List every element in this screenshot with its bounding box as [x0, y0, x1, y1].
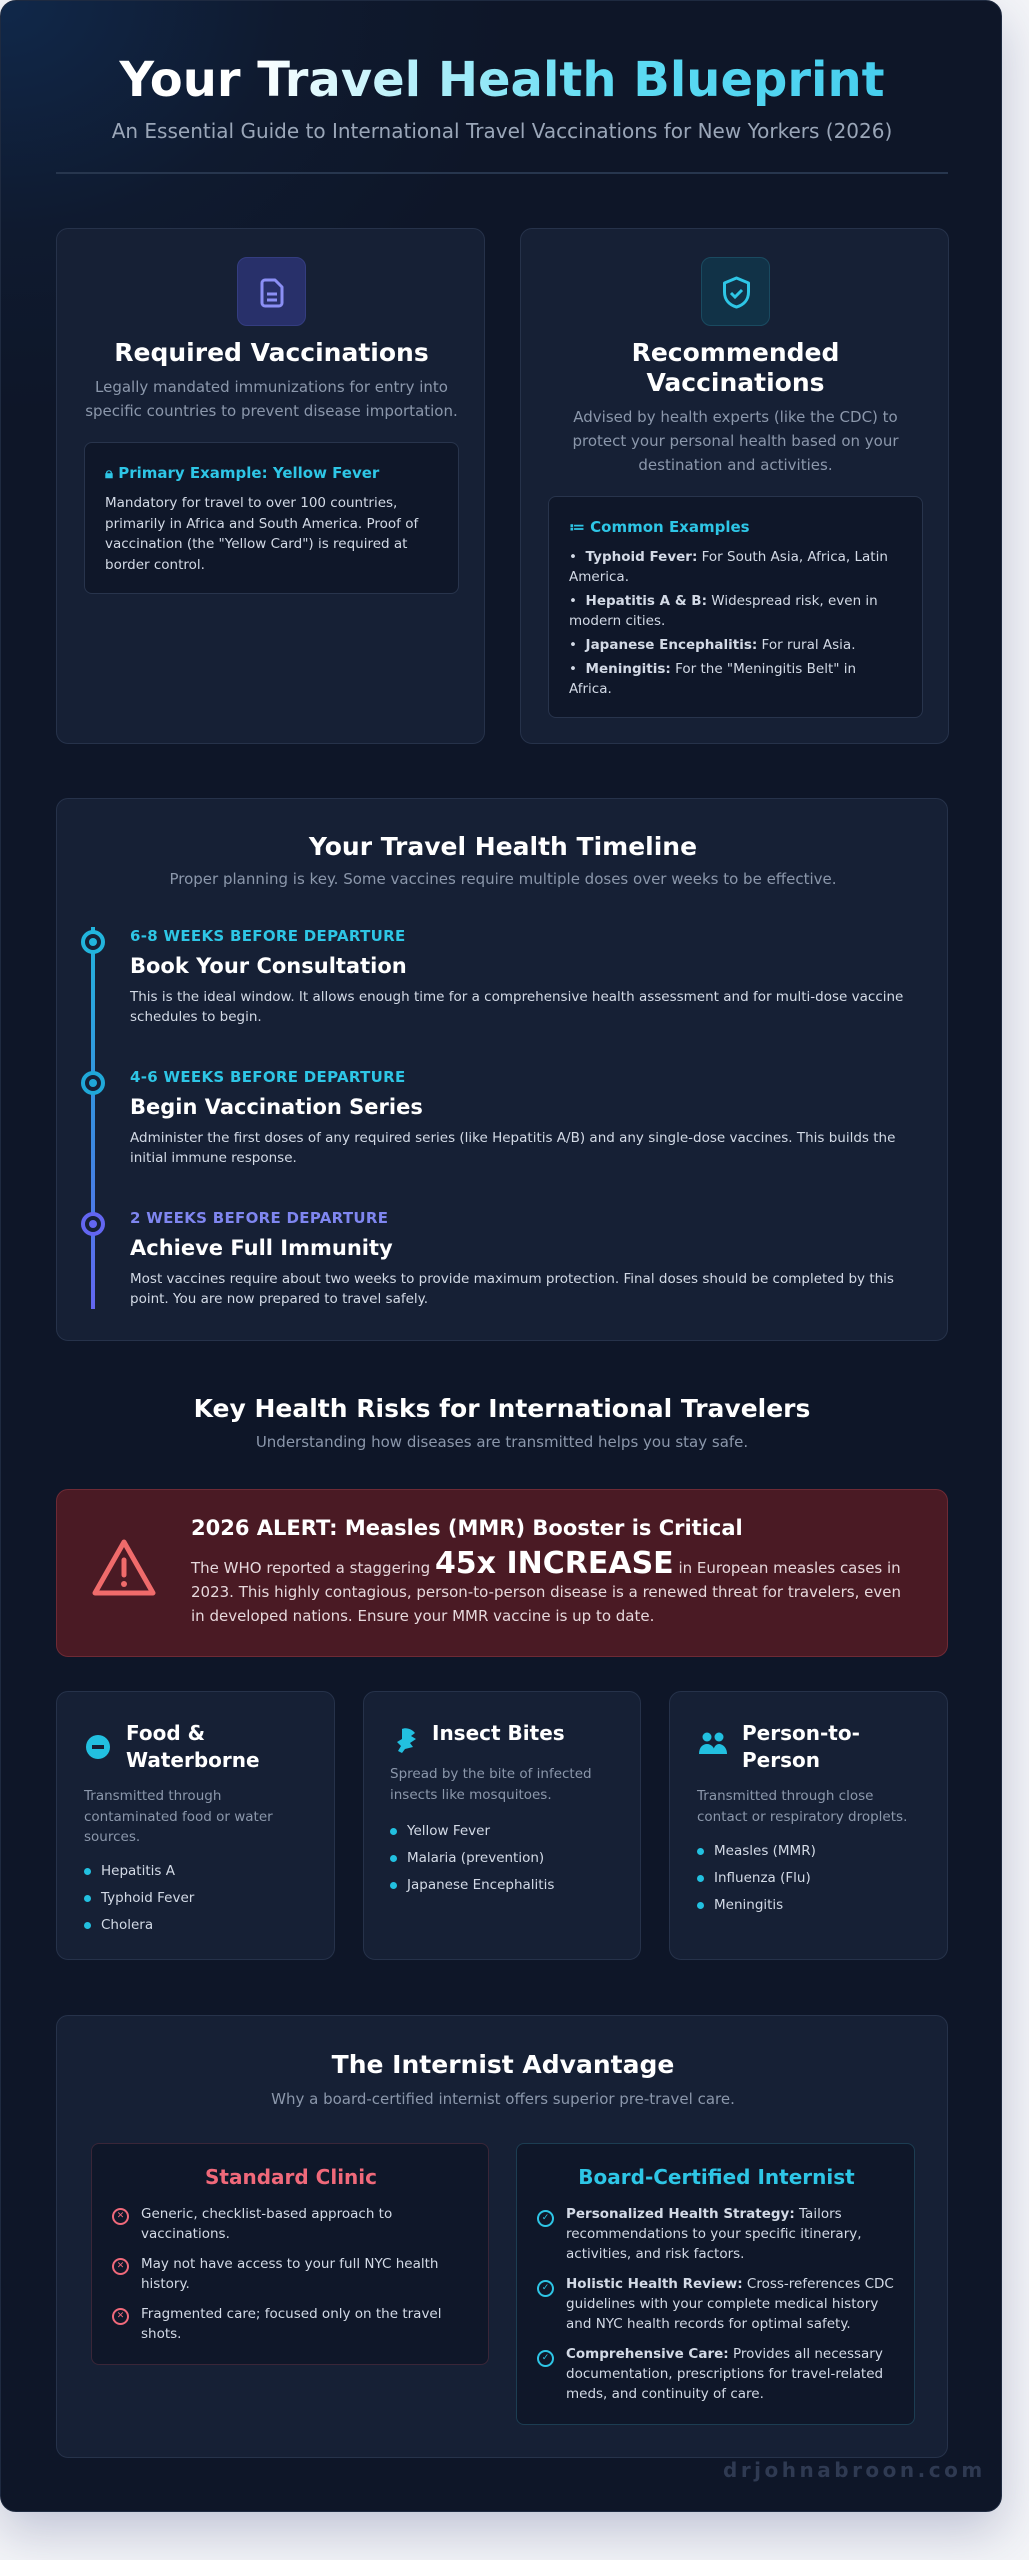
panel: food & waterborne: Hepatitis A: [101, 1863, 175, 1879]
box: standard clinic: ✕: [117, 2261, 124, 2271]
panel: recommended vaccinations: [520, 228, 949, 744]
callout: yellow fever: 🔒︎ Primary Example: Yellow Fever: [105, 464, 379, 482]
callout: common examples: • Typhoid Fever: For South Asia, Africa, Latin America.: [569, 549, 888, 585]
panel: person-to-person: Measles (MMR): [714, 1843, 816, 1859]
box: board-certified internist: Holistic Health Review: Cross-references CDC guidelines with your complete medical history and NYC health records for optimal safety.: [566, 2276, 894, 2332]
panel: person-to-person: [669, 1691, 948, 1960]
box: standard clinic: [91, 2143, 489, 2365]
heading: Vaccinations: [646, 368, 825, 397]
panel: food & waterborne: [56, 1691, 335, 1960]
step 1: Book Your Consultation: [130, 954, 407, 978]
step 1: This is the ideal window. It allows enough time for a comprehensive health assessment and for multi-dose vaccine schedules to begin.: [130, 989, 903, 1025]
step 3: 2 WEEKS BEFORE DEPARTURE: [130, 1209, 388, 1227]
panel: internist advantage: The Internist Advantage: [332, 2050, 674, 2079]
box: board-certified internist: Personalized Health Strategy: Tailors recommendations to your specific itinerary, activities, and risk factors.: [566, 2206, 862, 2262]
subtitle: An Essential Guide to International Travel Vaccinations for New Yorkers (2026): [112, 119, 892, 143]
step 1: [81, 927, 903, 1025]
box: board-certified internist: ✓: [542, 2283, 549, 2293]
panel: food & waterborne: Transmitted through contaminated food or water sources.: [84, 1788, 273, 1845]
icon: no-entry: [86, 1735, 110, 1759]
callout: common examples: • Hepatitis A & B: Widespread risk, even in modern cities.: [569, 593, 878, 629]
title: Your Travel Health Blueprint: [119, 52, 885, 108]
callout: measles alert: 2026 ALERT: Measles (MMR) Booster is Critical: [191, 1516, 743, 1540]
box: board-certified internist: [516, 2143, 915, 2425]
callout: common examples: • Japanese Encephalitis: For rural Asia.: [569, 637, 856, 653]
panel: person-to-person: Person-to-: [742, 1721, 860, 1745]
step 2: 4-6 WEEKS BEFORE DEPARTURE: [130, 1068, 406, 1086]
heading: Your Travel Health Timeline: [309, 832, 697, 861]
box: standard clinic: Fragmented care; focused only on the travel shots.: [141, 2306, 442, 2342]
panel: person-to-person: Person: [742, 1748, 820, 1772]
box: board-certified internist: ✓: [542, 2353, 549, 2363]
box: standard clinic: ✕: [117, 2211, 124, 2221]
subtitle: risks: Understanding how diseases are transmitted helps you stay safe.: [256, 1433, 748, 1451]
box: board-certified internist: ✓: [542, 2213, 549, 2223]
panel: food & waterborne: Waterborne: [126, 1748, 260, 1772]
step 2: Begin Vaccination Series: [130, 1095, 423, 1119]
heading: key health risks: Key Health Risks for International Travelers: [194, 1394, 810, 1423]
heading: Required Vaccinations: [114, 338, 429, 367]
panel: food & waterborne: Cholera: [101, 1917, 153, 1933]
panel: timeline: [56, 798, 948, 1341]
callout: common examples: • Meningitis: For the "Meningitis Belt" in Africa.: [569, 661, 856, 697]
icon: shield: [701, 257, 770, 326]
heading: Recommended: [632, 338, 839, 367]
callout: measles alert: The WHO reported a staggering 45x INCREASE in European measles cases in 2023. This highly contagious, person-to-person disease is a renewed threat for travelers, even in developed nations. Ensure your MMR vaccine is up to date.: [191, 1546, 901, 1625]
panel: internist advantage: Why a board-certified internist offers superior pre-travel care.: [271, 2090, 735, 2108]
panel: insect bites: Yellow Fever: [407, 1823, 490, 1839]
panel: internist advantage: [56, 2015, 948, 2458]
callout: yellow fever: [84, 442, 459, 594]
box: standard clinic: Standard Clinic: [205, 2165, 377, 2189]
callout: measles alert: [56, 1489, 948, 1657]
box: standard clinic: Generic, checklist-based approach to vaccinations.: [141, 2206, 392, 2242]
callout: yellow fever: Mandatory for travel to over 100 countries, primarily in Africa and South America. Proof of vaccination (the "Yellow Card") is required at border control.: [105, 495, 418, 572]
step 2: [81, 1068, 895, 1166]
panel: insect bites: [363, 1691, 641, 1960]
description: Advised by health experts (like the CDC) to protect your personal health based on your destination and activities.: [572, 408, 899, 474]
panel: person-to-person: Meningitis: [714, 1897, 783, 1913]
heading: [632, 338, 839, 397]
panel: insect bites: Insect Bites: [432, 1721, 565, 1745]
icon: warning: [92, 1540, 156, 1596]
title: [1, 48, 1003, 112]
icon: people: [699, 1732, 727, 1754]
step 3: Most vaccines require about two weeks to provide maximum protection. Final doses should be completed by this point. You are now prepared to travel safely.: [130, 1271, 894, 1307]
box: standard clinic: May not have access to your full NYC health history.: [141, 2256, 438, 2292]
box: standard clinic: ✕: [117, 2311, 124, 2321]
callout: common examples: ≔ Common Examples: [569, 518, 750, 536]
watermark: drjohnabroon.com: [723, 2458, 986, 2482]
panel: insect bites: Malaria (prevention): [407, 1850, 544, 1866]
icon: document: [237, 257, 306, 326]
step 2: Administer the first doses of any required series (like Hepatitis A/B) and any single-dose vaccines. This builds the initial immune response.: [130, 1130, 895, 1166]
description: Legally mandated immunizations for entry into specific countries to prevent disease importation.: [85, 378, 458, 420]
icon: bug: [397, 1728, 416, 1753]
callout: common examples: [548, 496, 923, 718]
step 3: Achieve Full Immunity: [130, 1236, 393, 1260]
panel: person-to-person: Transmitted through close contact or respiratory droplets.: [697, 1788, 907, 1824]
panel: food & waterborne: Food &: [126, 1721, 205, 1745]
panel: food & waterborne: Typhoid Fever: [101, 1890, 194, 1906]
step 1: 6-8 WEEKS BEFORE DEPARTURE: [130, 927, 406, 945]
box: board-certified internist: Comprehensive Care: Provides all necessary documentation, prescriptions for travel-related meds, and continuity of care.: [566, 2346, 883, 2402]
box: board-certified internist: Board-Certified Internist: [578, 2165, 855, 2189]
panel: required vaccinations: [56, 228, 485, 744]
panel: person-to-person: Influenza (Flu): [714, 1870, 811, 1886]
step 3: [81, 1209, 894, 1307]
panel: insect bites: Spread by the bite of infected insects like mosquitoes.: [390, 1766, 592, 1802]
timeline line: [91, 927, 95, 1309]
panel: insect bites: Japanese Encephalitis: [407, 1877, 554, 1893]
subtitle: Proper planning is key. Some vaccines require multiple doses over weeks to be effective.: [169, 870, 837, 888]
